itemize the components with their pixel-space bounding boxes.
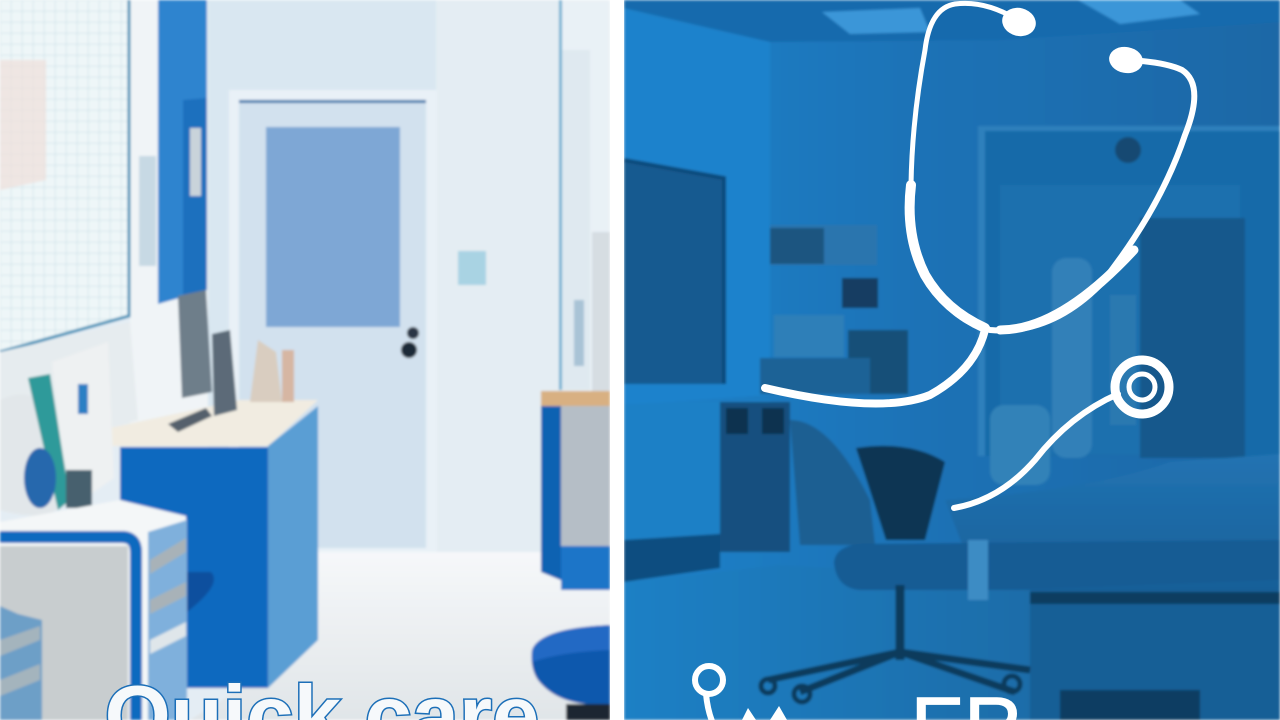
ceiling (624, 0, 933, 42)
door and frame (229, 90, 437, 552)
floor (793, 592, 1028, 718)
hospital bed (945, 454, 1280, 590)
right counter (541, 391, 610, 407)
clinic room photo scene (0, 0, 610, 720)
wall cabinet (158, 0, 207, 304)
panel: quick care clinic room (0, 0, 610, 720)
desk with monitor (100, 400, 318, 446)
whiteboard (0, 0, 130, 352)
left wall (0, 344, 136, 420)
back wall (208, 0, 435, 406)
back room opening (986, 132, 1028, 454)
chair back (790, 420, 875, 545)
round stool (530, 648, 610, 707)
right wall fixtures (562, 50, 590, 390)
wall note (458, 251, 486, 285)
wall panels (139, 156, 156, 266)
wheeled stool (761, 585, 1030, 702)
floor (190, 552, 610, 720)
medical wall equipment (770, 225, 877, 265)
panel: emergency room (624, 0, 1280, 720)
icon: small ER heartbeat stethoscope (695, 666, 787, 720)
corner drawer unit (0, 606, 42, 720)
front cabinet (0, 500, 186, 720)
emergency room photo scene (624, 0, 1280, 720)
left wall and window (632, 34, 770, 396)
left wall machine (66, 428, 112, 490)
stool seat (187, 572, 214, 612)
icon: stethoscope (765, 3, 1194, 508)
